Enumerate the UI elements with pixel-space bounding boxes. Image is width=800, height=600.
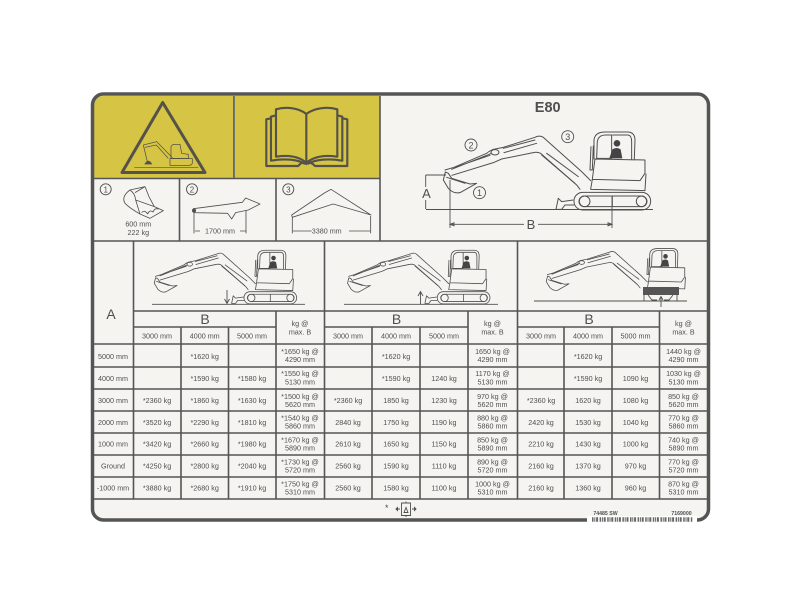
row: 3000 mm: 5620 mm bbox=[669, 400, 698, 409]
row: 5000 mm: 4290 mm bbox=[478, 355, 507, 364]
row: -1000 mm: *1910 kg bbox=[238, 484, 266, 492]
dimension A: A bbox=[422, 186, 431, 201]
row: Ground: 1590 kg bbox=[383, 462, 409, 470]
heading: kg at max B group 2: kg @ bbox=[484, 319, 501, 328]
row: Ground: 1110 kg bbox=[432, 462, 456, 470]
column headers group 2: 5000 mm bbox=[429, 332, 459, 340]
dimension A bbox=[419, 175, 446, 209]
column headers group 3: 3000 mm bbox=[526, 332, 556, 340]
number 3: 3 bbox=[286, 185, 291, 194]
row: 2000 mm: *1810 kg bbox=[238, 418, 266, 427]
column headers group 1: 5000 mm bbox=[237, 332, 267, 340]
heading: kg at max B group 2 bbox=[481, 319, 504, 336]
boom length: 3380 mm bbox=[312, 226, 342, 236]
heading: kg at max B group 1: kg @ bbox=[292, 319, 308, 328]
row: 2000 mm: *3520 kg bbox=[143, 418, 171, 427]
row: Ground: Ground bbox=[101, 462, 125, 470]
column headers group 2 bbox=[333, 332, 459, 340]
row: 3000 mm: 1620 kg bbox=[575, 396, 601, 405]
row: -1000 mm: *1750 kg @ bbox=[281, 480, 319, 488]
row: -1000 mm: 5310 mm bbox=[285, 488, 315, 496]
row: -1000 mm: 5310 mm bbox=[669, 488, 698, 496]
panel: blade down diagram bbox=[152, 250, 305, 304]
row: 3000 mm: *1500 kg @ bbox=[281, 392, 319, 401]
row: 4000 mm: 5130 mm bbox=[669, 378, 698, 386]
row: 2000 mm: 880 kg @ bbox=[477, 414, 508, 422]
row: 1000 mm: 1430 kg bbox=[575, 440, 601, 448]
row: 3000 mm: *2360 kg bbox=[334, 396, 362, 405]
row: 4000 mm: *1590 kg bbox=[382, 374, 410, 383]
bucket width: 600 mm bbox=[125, 220, 151, 228]
callout 3: 3 bbox=[565, 132, 570, 142]
row: 1000 mm: 1650 kg bbox=[383, 440, 409, 448]
excavator bbox=[348, 250, 490, 304]
row: 5000 mm: *1650 kg @ bbox=[281, 347, 319, 356]
row: 5000 mm: 4290 mm bbox=[669, 355, 698, 364]
row: 3000 mm bbox=[98, 392, 699, 409]
row: 4000 mm: 4000 mm bbox=[98, 374, 128, 383]
row: 1000 mm bbox=[98, 436, 699, 452]
row: 3000 mm: 850 kg @ bbox=[668, 392, 699, 401]
row: 1000 mm: *3420 kg bbox=[143, 440, 171, 448]
excavator bbox=[154, 250, 297, 304]
column headers group 1: 4000 mm bbox=[190, 332, 220, 340]
number 1: 1 bbox=[103, 185, 108, 194]
row: Ground: 970 kg bbox=[625, 462, 646, 470]
ground line bbox=[152, 303, 305, 305]
column headers group 2: 3000 mm bbox=[333, 332, 363, 340]
row: 3000 mm: *1630 kg bbox=[238, 396, 266, 405]
column headers group 2: 4000 mm bbox=[381, 332, 411, 340]
row: 1000 mm: 850 kg @ bbox=[477, 436, 508, 444]
row: 2000 mm: 1190 kg bbox=[431, 418, 457, 427]
callout 1 bbox=[474, 187, 486, 199]
row: 4000 mm: *1590 kg bbox=[574, 374, 602, 383]
row: -1000 mm: 1580 kg bbox=[383, 484, 409, 492]
row: 2000 mm: 5860 mm bbox=[285, 422, 315, 430]
column headers group 1 bbox=[142, 332, 267, 340]
row: 2000 mm bbox=[98, 414, 699, 430]
row: 1000 mm: 5890 mm bbox=[285, 444, 315, 452]
row: 5000 mm: 5000 mm bbox=[98, 352, 128, 361]
part number right: 7169000 bbox=[671, 511, 692, 517]
row: 1000 mm: 1000 kg bbox=[623, 440, 648, 448]
heading: kg at max B group 1: max. B bbox=[289, 328, 311, 336]
row: 3000 mm: *2360 kg bbox=[527, 396, 555, 405]
row: Ground: 5720 mm bbox=[478, 466, 507, 474]
panel: bucket spec bbox=[100, 184, 163, 237]
row: 1000 mm: 5890 mm bbox=[669, 444, 698, 452]
footnote symbol bbox=[385, 502, 416, 517]
row: Ground: 770 kg @ bbox=[668, 458, 699, 466]
row: -1000 mm: 960 kg bbox=[625, 484, 646, 492]
row: -1000 mm bbox=[97, 480, 699, 496]
panel: boom spec bbox=[283, 184, 371, 236]
ground line bbox=[426, 208, 653, 210]
heading: kg at max B group 2: max. B bbox=[481, 328, 504, 336]
callout 1: 1 bbox=[477, 188, 482, 198]
row: 2000 mm: 1750 kg bbox=[383, 418, 409, 427]
row: 4000 mm: 1090 kg bbox=[623, 374, 648, 383]
dimension B bbox=[450, 180, 612, 232]
callout 2 bbox=[465, 139, 477, 151]
row: 3000 mm: 5620 mm bbox=[478, 400, 507, 409]
row: Ground: 2560 kg bbox=[335, 462, 361, 470]
icon: open book bbox=[266, 108, 347, 166]
arrow down bbox=[224, 290, 230, 304]
row: Ground: *2040 kg bbox=[238, 462, 266, 470]
excavator side view bbox=[443, 132, 651, 210]
panel: arm spec bbox=[186, 184, 260, 236]
table grid bbox=[93, 96, 708, 499]
row: 3000 mm: 5620 mm bbox=[285, 400, 315, 409]
support block bbox=[643, 287, 679, 295]
row: 3000 mm: *1860 kg bbox=[191, 396, 219, 405]
excavator bbox=[546, 249, 685, 290]
row: 1000 mm: 5890 mm bbox=[478, 444, 507, 452]
row: 1000 mm: *1670 kg @ bbox=[281, 436, 319, 444]
icon: boom bbox=[292, 189, 371, 233]
row: 2000 mm: 1530 kg bbox=[575, 418, 601, 427]
row: 1000 mm: 740 kg @ bbox=[668, 436, 699, 444]
column headers group 3 bbox=[526, 332, 650, 340]
panel: read the manual bbox=[235, 96, 380, 178]
support legs bbox=[644, 295, 677, 301]
row: 3000 mm: *2360 kg bbox=[143, 396, 171, 405]
row: 5000 mm bbox=[98, 347, 701, 364]
row: -1000 mm: 1000 kg @ bbox=[475, 480, 510, 488]
row: 4000 mm bbox=[98, 369, 701, 386]
row: 4000 mm: *1550 kg @ bbox=[281, 369, 319, 378]
row: 4000 mm: 5130 mm bbox=[478, 378, 507, 386]
panel: E80 dimensions diagram bbox=[419, 100, 653, 232]
panel: jacked up diagram bbox=[534, 249, 687, 307]
row: 2000 mm: 2420 kg bbox=[528, 418, 554, 427]
row: 5000 mm: 4290 mm bbox=[285, 355, 315, 364]
row: Ground: 5720 mm bbox=[669, 466, 698, 474]
row: -1000 mm: 870 kg @ bbox=[668, 480, 699, 488]
row: 2000 mm: 2840 kg bbox=[335, 418, 361, 427]
heading: B group 2: B bbox=[392, 311, 401, 327]
arrow up bbox=[659, 296, 663, 307]
panel: blade up diagram bbox=[344, 250, 498, 304]
heading: B group 1: B bbox=[200, 311, 210, 327]
column headers group 3: 5000 mm bbox=[621, 332, 650, 340]
row: -1000 mm: 1360 kg bbox=[575, 484, 601, 492]
column headers group 1: 3000 mm bbox=[142, 332, 172, 340]
row: 4000 mm: 1170 kg @ bbox=[475, 369, 510, 378]
bucket weight: 222 kg bbox=[128, 228, 149, 237]
row: 3000 mm: 3000 mm bbox=[98, 396, 128, 405]
footnote symbol: * bbox=[385, 503, 389, 513]
icon: bucket bbox=[124, 187, 163, 218]
row: 3000 mm: 1080 kg bbox=[623, 396, 648, 405]
row: 1000 mm: 2210 kg bbox=[528, 440, 554, 448]
row: Ground: 5720 mm bbox=[285, 466, 315, 474]
dimension B: B bbox=[527, 217, 535, 232]
model title: E80 bbox=[535, 100, 561, 116]
icon: warning triangle bbox=[122, 102, 205, 172]
row: -1000 mm: 5310 mm bbox=[478, 488, 507, 496]
row: 5000 mm: *1620 kg bbox=[191, 352, 219, 361]
label card bbox=[92, 94, 708, 523]
row: 5000 mm: 1650 kg @ bbox=[475, 347, 510, 356]
ground line bbox=[344, 303, 498, 305]
row: 5000 mm: *1620 kg bbox=[382, 352, 410, 361]
arm length: 1700 mm bbox=[205, 226, 235, 236]
row: Ground: 890 kg @ bbox=[477, 458, 508, 466]
row: 3000 mm: 970 kg @ bbox=[477, 392, 508, 401]
icon: excavator in triangle bbox=[134, 142, 198, 167]
row: -1000 mm: -1000 mm bbox=[97, 484, 129, 492]
row: 3000 mm: 1850 kg bbox=[383, 396, 409, 405]
row: 1000 mm: 1150 kg bbox=[431, 440, 457, 448]
row: 1000 mm: 1000 mm bbox=[98, 440, 128, 448]
row: Ground bbox=[101, 458, 699, 474]
part number left: 74485 SW bbox=[593, 511, 618, 517]
heading: kg at max B group 3: max. B bbox=[672, 328, 695, 336]
row heading: A: A bbox=[106, 306, 116, 322]
icon: arm bbox=[192, 198, 260, 233]
row: Ground: *4250 kg bbox=[143, 462, 171, 470]
heading: kg at max B group 3: kg @ bbox=[675, 319, 692, 328]
icon: machine plan view with arrows bbox=[396, 502, 416, 517]
heading: kg at max B group 3 bbox=[672, 319, 695, 336]
arrow up bbox=[418, 292, 423, 304]
card background bbox=[92, 94, 708, 520]
callout 2: 2 bbox=[468, 140, 474, 150]
row: -1000 mm: 1100 kg bbox=[431, 484, 457, 492]
row: -1000 mm: *2680 kg bbox=[191, 484, 219, 492]
row: 4000 mm: *1590 kg bbox=[191, 374, 219, 383]
row: 1000 mm: 2610 kg bbox=[335, 440, 361, 448]
row: 2000 mm: 2000 mm bbox=[98, 418, 128, 427]
row: 5000 mm: *1620 kg bbox=[574, 352, 602, 361]
heading: B group 3: B bbox=[584, 311, 594, 327]
row: 3000 mm: 1230 kg bbox=[431, 396, 457, 405]
row: 2000 mm: 770 kg @ bbox=[668, 414, 699, 422]
row: 2000 mm: 5860 mm bbox=[478, 422, 507, 430]
column headers group 3: 4000 mm bbox=[573, 332, 603, 340]
row: 1000 mm: *1980 kg bbox=[238, 440, 266, 448]
part numbers and barcode bbox=[587, 511, 697, 523]
row: 4000 mm: *1580 kg bbox=[238, 374, 266, 383]
row: 4000 mm: 5130 mm bbox=[285, 378, 315, 386]
row: Ground: 1370 kg bbox=[575, 462, 601, 470]
row: 4000 mm: 1030 kg @ bbox=[666, 369, 701, 378]
row: Ground: *1730 kg @ bbox=[281, 458, 319, 466]
row: Ground: *2800 kg bbox=[191, 462, 219, 470]
heading: kg at max B group 1 bbox=[289, 319, 311, 336]
row: -1000 mm: *3880 kg bbox=[143, 484, 171, 492]
row: -1000 mm: 2160 kg bbox=[528, 484, 554, 492]
row: 4000 mm: 1240 kg bbox=[431, 374, 457, 383]
row: 1000 mm: *2660 kg bbox=[191, 440, 219, 448]
card border bbox=[92, 94, 708, 520]
row: 5000 mm: 1440 kg @ bbox=[666, 347, 701, 356]
ground line bbox=[534, 300, 687, 302]
barcode bbox=[592, 517, 693, 522]
row: 2000 mm: *1540 kg @ bbox=[281, 414, 319, 422]
number 2: 2 bbox=[190, 185, 195, 194]
row: Ground: 2160 kg bbox=[528, 462, 554, 470]
row: 2000 mm: *2290 kg bbox=[191, 418, 219, 427]
row: 2000 mm: 1040 kg bbox=[623, 418, 648, 427]
panel: warning sign bbox=[93, 96, 234, 178]
row: -1000 mm: 2560 kg bbox=[335, 484, 361, 492]
row: 2000 mm: 5860 mm bbox=[669, 422, 698, 430]
callout 3 bbox=[562, 131, 574, 143]
